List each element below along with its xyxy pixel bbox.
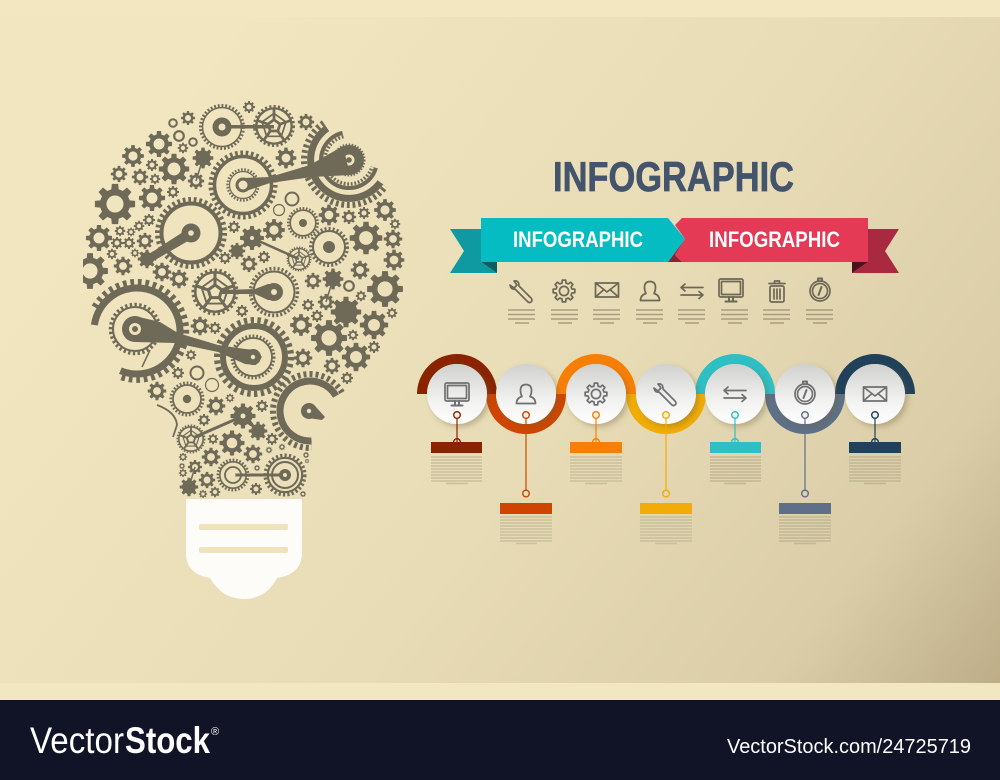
icon: trash [769,281,785,302]
illustration: light bulb made of gears [72,101,404,599]
step 1 [427,364,487,484]
footer bar [0,700,1000,780]
timeline [422,359,910,544]
ribbon cyan segment [481,218,685,262]
large arc gear bottom right [273,374,342,448]
step 6 [775,364,835,544]
ribbon red segment [668,218,868,262]
step 2 [496,364,556,544]
icon captions [508,310,833,323]
icon: monitor [719,279,743,302]
step 7 [845,364,905,484]
ribbon right tail [852,229,899,273]
ribbon cyan segment: INFOGRAPHIC [513,227,643,252]
large gear bottom center with arm [122,316,291,394]
large arc gear bottom left [94,282,186,380]
icon row [510,278,830,303]
icon: user [640,282,660,300]
large arc gear top right [304,123,386,205]
wave arcs [422,359,910,429]
icon: envelope [596,283,618,297]
footer image id: VectorStock.com/24725719 [727,736,971,758]
gears at bulb neck [157,383,305,496]
icon: stopwatch [810,278,830,301]
ribbon banner [450,218,899,273]
footer logo bold: Stock [125,720,210,761]
gear pair middle [193,268,298,316]
ribbon left tail [450,229,497,273]
gear with arm top center [211,146,350,217]
gear pair top [200,106,294,148]
title: INFOGRAPHIC [553,153,794,200]
icon: wrench [510,281,532,303]
step 3 [566,364,626,484]
large gear left [146,200,224,266]
footer registered mark: ® [211,726,219,738]
footer logo: Vector [30,720,124,761]
ribbon red segment: INFOGRAPHIC [709,227,840,252]
step 5 [705,364,765,484]
step 4 [636,364,696,544]
bulb base [186,499,302,599]
icon: arrows [681,284,703,298]
icon: gear [553,280,575,302]
right fine gears [240,208,347,271]
small gears [72,101,404,498]
